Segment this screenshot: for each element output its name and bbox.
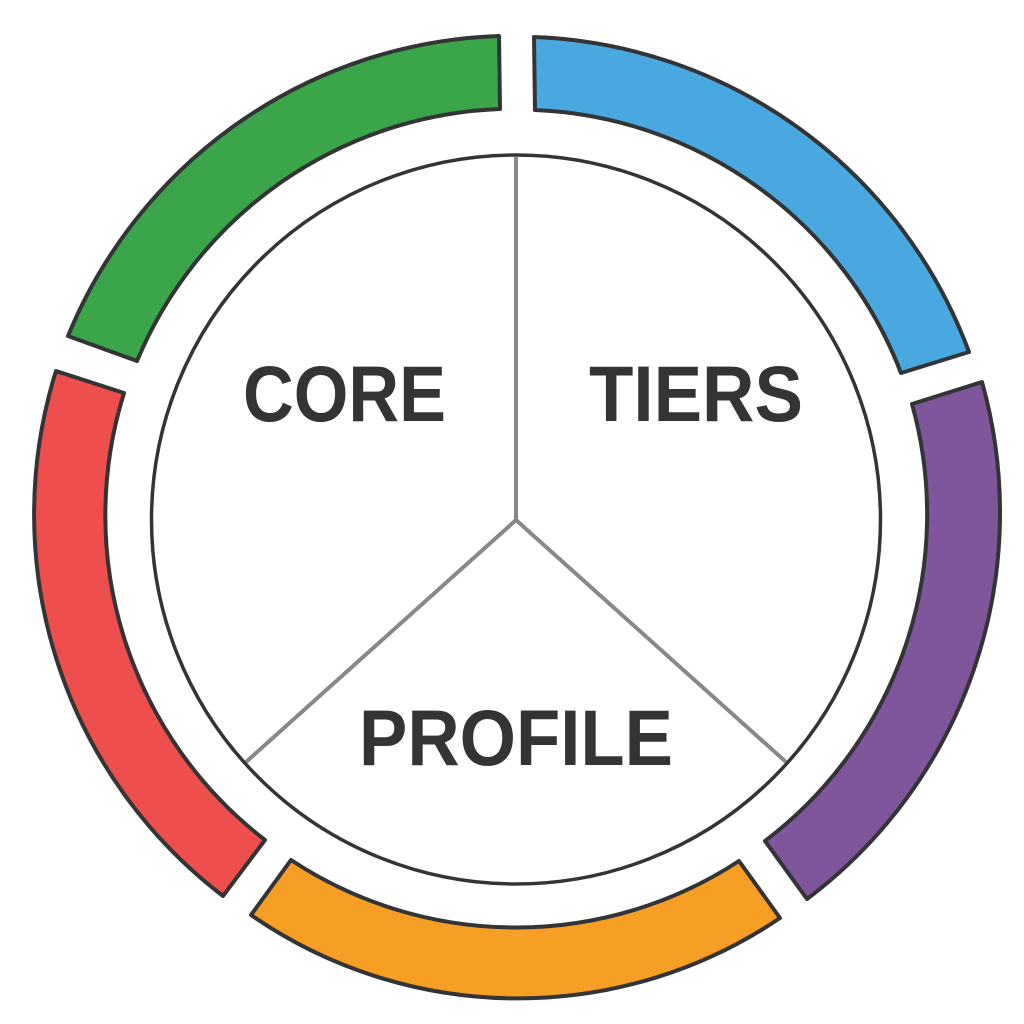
inner circle with dividers bbox=[152, 155, 880, 884]
ring segment: orange bbox=[251, 860, 780, 998]
label: TIERS: TIERS bbox=[589, 349, 803, 438]
ring segment: green bbox=[68, 36, 500, 361]
ring segment: purple bbox=[765, 382, 1000, 899]
label: CORE: CORE bbox=[243, 349, 446, 438]
label: PROFILE: PROFILE bbox=[359, 693, 673, 782]
ring segment: red bbox=[34, 371, 265, 896]
ring segment: blue bbox=[534, 37, 969, 373]
